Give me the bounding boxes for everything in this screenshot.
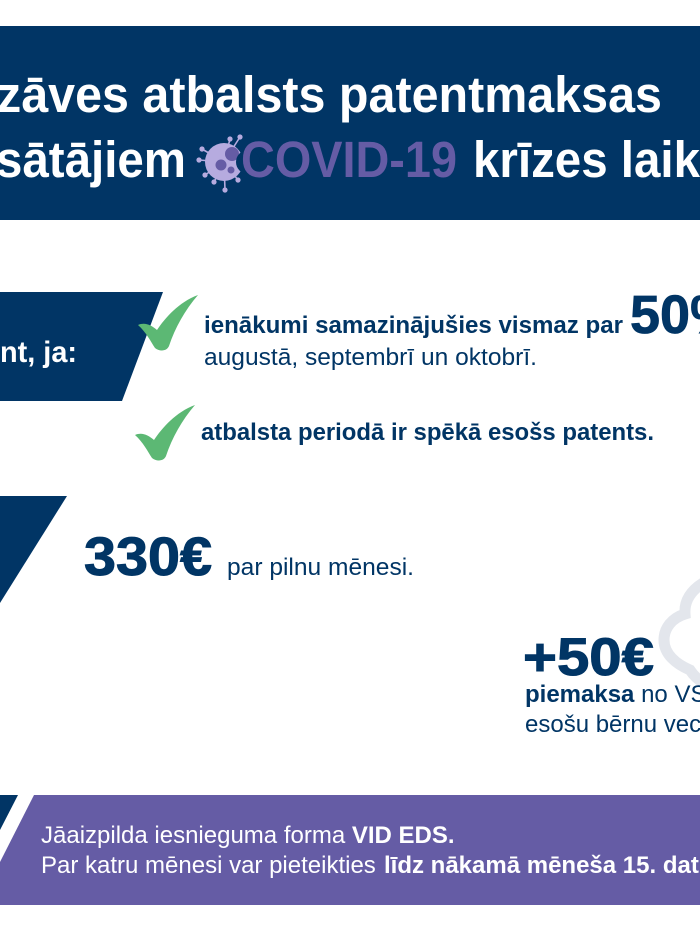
panel: application — [0, 795, 700, 905]
supplement amount: +50€ — [523, 628, 654, 687]
eligibility tag text: nt, ja: — [0, 336, 77, 369]
application line 1: Jāaizpilda iesnieguma forma VID EDS. — [41, 822, 455, 849]
application background — [0, 795, 700, 905]
icon: check mark 1 — [138, 295, 198, 350]
icon: virus — [197, 135, 260, 192]
COVID-19 label: COVID-19 — [241, 131, 457, 188]
amount note: par pilnu mēnesi. — [227, 554, 414, 581]
panel: amount tag — [0, 496, 67, 603]
icon: child outline — [664, 583, 700, 682]
criterion 1 text: ienākumi samazinājušies vismaz par — [204, 312, 623, 339]
icon: check mark 2 — [135, 405, 195, 460]
application line 2: līdz nākamā mēneša 15. dat — [384, 852, 699, 879]
application line 2: Par katru mēnesi var pieteikties — [41, 852, 376, 879]
criterion 2 text: atbalsta periodā ir spēkā esošs patents. — [201, 419, 654, 446]
title line 2 start: sātājiem — [0, 131, 186, 188]
amount 330 euro: 330€ — [84, 527, 212, 587]
criterion 1 months: augustā, septembrī un oktobrī. — [204, 344, 537, 371]
panel: eligibility tag — [0, 292, 163, 401]
criterion 1 text — [204, 285, 700, 371]
supplement line 2: esošu bērnu vec — [525, 711, 700, 738]
title line 1: zāves atbalsts patentmaksas — [0, 66, 662, 123]
panel: header banner — [0, 26, 700, 220]
child supplement — [523, 628, 700, 738]
